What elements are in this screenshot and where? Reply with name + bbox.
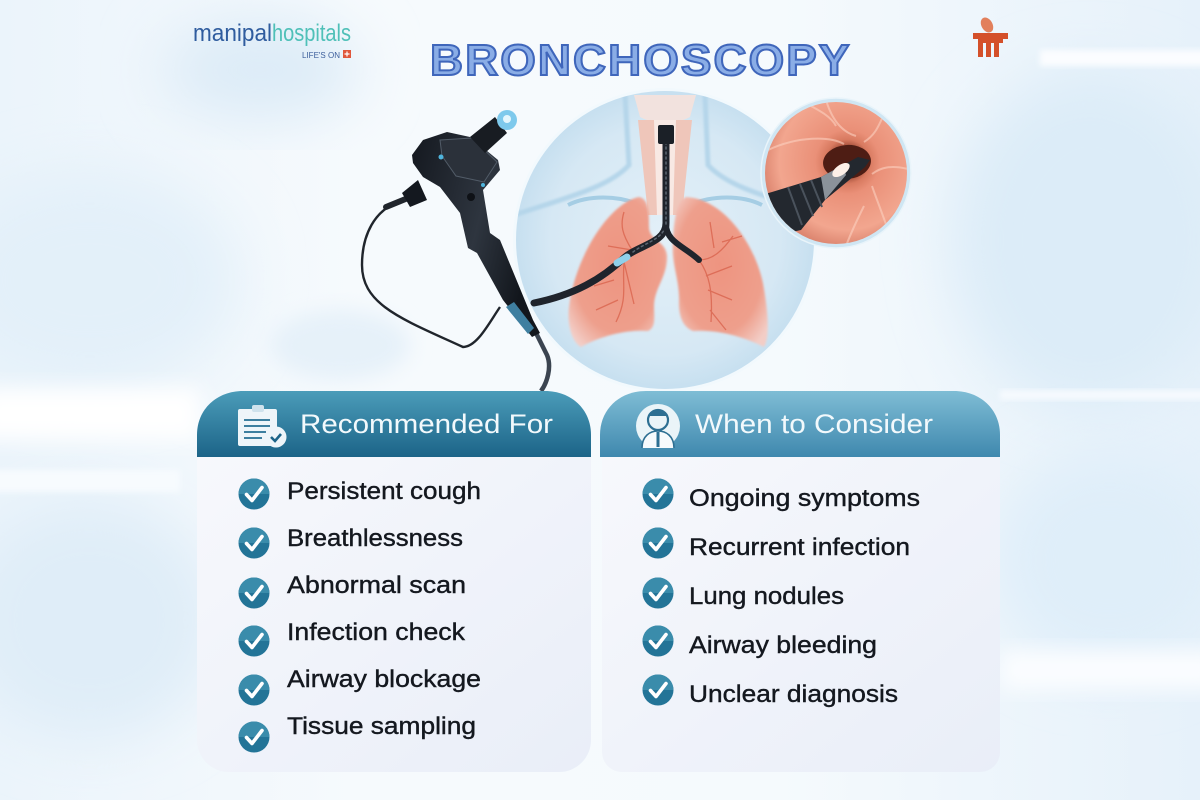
heading: Recommended For (300, 409, 553, 439)
check item: Recurrent infection (642, 528, 910, 561)
icon: clipboard (238, 405, 286, 448)
left lung (568, 197, 667, 347)
neck and shoulders (518, 96, 765, 216)
title: BRONCHOSCOPY (430, 35, 851, 85)
bronchial branches (594, 212, 742, 330)
check item: Persistent cough (238, 478, 481, 510)
scope tip in inset (768, 157, 870, 232)
light tip (497, 110, 517, 130)
eyepiece (470, 117, 507, 153)
cable loop (362, 203, 500, 347)
check item: Abnormal scan (238, 572, 466, 608)
illustration: airway inset circle (761, 98, 912, 248)
logo: manipal hospitals (193, 20, 351, 60)
bottom insertion tube (536, 333, 549, 391)
panel: recommended for (197, 391, 591, 772)
check item: Unclear diagnosis: Unclear diagnosis (689, 681, 898, 708)
check item: Lung nodules: Lung nodules (689, 583, 844, 610)
check item: Abnormal scan: Abnormal scan (287, 572, 466, 599)
check item: Persistent cough: Persistent cough (287, 478, 481, 505)
check item: Recurrent infection: Recurrent infection (689, 534, 910, 561)
check item: Tissue sampling: Tissue sampling (287, 713, 476, 740)
logo: manipal hospitals: manipal (193, 20, 272, 47)
check item: Ongoing symptoms (642, 478, 920, 512)
check item: Airway bleeding: Airway bleeding (689, 632, 877, 659)
handle body (412, 132, 540, 337)
check item: Airway blockage: Airway blockage (287, 666, 481, 693)
panel header (600, 391, 1000, 457)
check item: Unclear diagnosis (642, 674, 898, 708)
check item: Breathlessness: Breathlessness (287, 525, 463, 552)
logo: orange emblem (973, 15, 1008, 57)
check item: Breathlessness (238, 525, 463, 558)
heading: When to Consider (695, 409, 933, 439)
logo: manipal hospitals: LIFE'S ON (302, 51, 340, 60)
check item: Infection check: Infection check (287, 619, 466, 646)
panel: when to consider (600, 391, 1000, 772)
bronchoscope tube in airway (534, 132, 699, 303)
right lung (673, 197, 768, 347)
handle controls (440, 138, 497, 182)
logo: manipal hospitals: hospitals (272, 20, 351, 47)
illustration: bronchoscope handle (362, 110, 549, 391)
icon: doctor (636, 404, 680, 448)
check item: Airway blockage (238, 666, 481, 706)
check item: Lung nodules (642, 578, 844, 610)
illustration: main lungs circle (513, 88, 823, 392)
panel header (197, 391, 591, 457)
throat (634, 95, 696, 120)
check item: Ongoing symptoms: Ongoing symptoms (689, 485, 920, 512)
trachea (638, 120, 692, 215)
check item: Tissue sampling (238, 713, 476, 752)
check item: Infection check (238, 619, 466, 656)
check item: Airway bleeding (642, 626, 877, 659)
